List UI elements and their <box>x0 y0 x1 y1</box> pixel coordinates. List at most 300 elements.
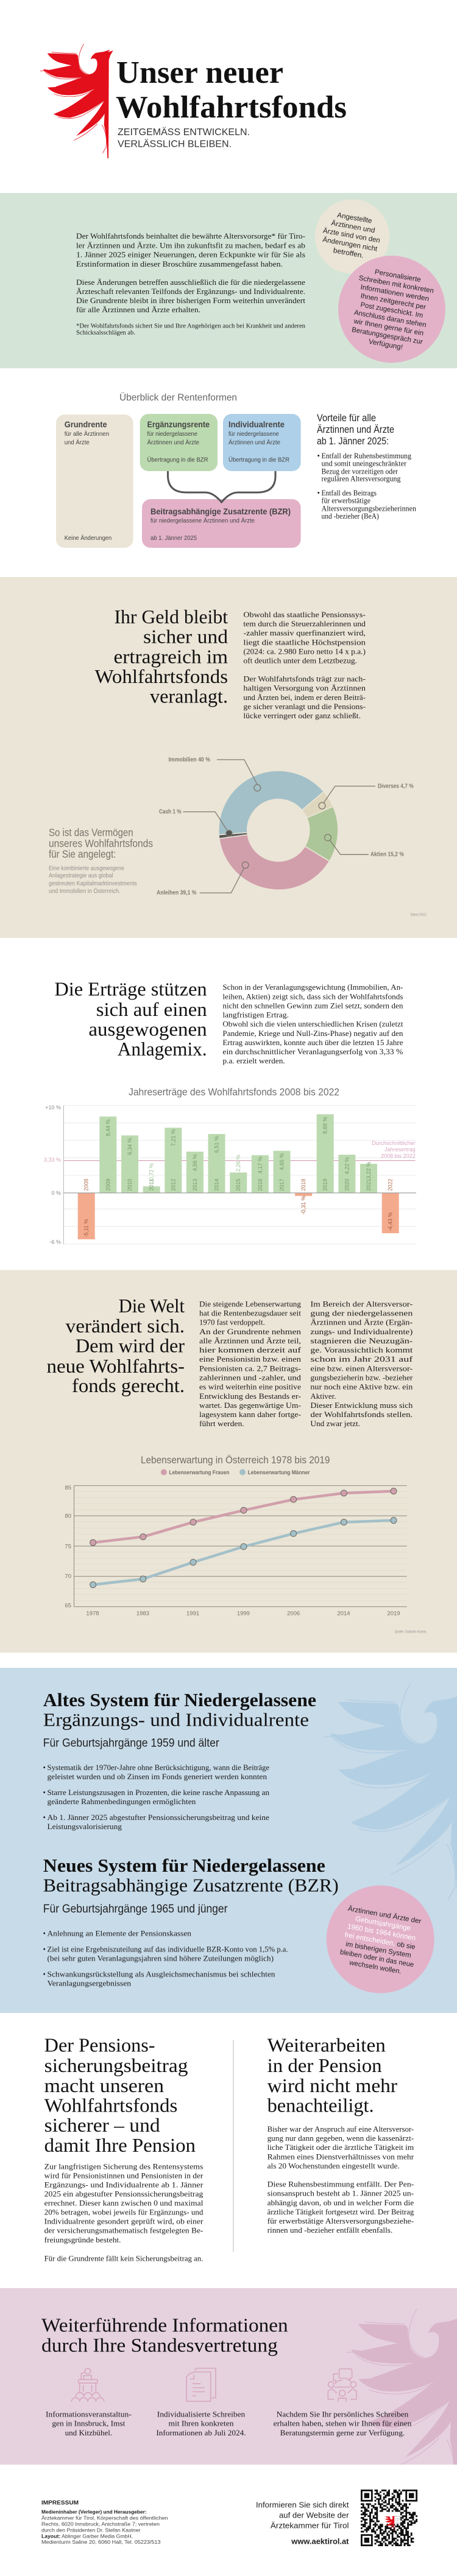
body text column 2: gung der niedergelassenen <box>310 1309 413 1318</box>
panel: contribution and continued work <box>0 2013 457 2288</box>
panel: the world is changing <box>0 1270 457 1653</box>
body text: Schon in der Veranlagungsgewichtung (Immobilien, An- <box>222 983 403 992</box>
callout: birth years 1960 to 1964: frei entscheiden, ob sie <box>344 1931 416 1951</box>
callout: employed doctors: betroffen. <box>333 247 364 260</box>
text: letters: Informationen ab Juli 2024. <box>156 2429 246 2437</box>
bar chart: annual returns: 6,34 % <box>127 1138 133 1155</box>
callout: birth years 1960 to 1964: 1960 bis 1964 können <box>347 1923 416 1942</box>
subtitle <box>118 127 250 150</box>
panel: returns <box>0 938 457 1270</box>
intro text: 1. Jänner 2025 einiger Neuerungen, deren Eckpunkte wir für Sie als <box>76 251 305 259</box>
heading: new system: Für Geburtsjahrgänge 1965 und jünger <box>43 1903 228 1916</box>
heading: continued work <box>267 2034 397 2116</box>
list: new system: Ziel ist eine Ergebniszuteilung auf das individuelle BZR-Konto von 1,5% p.a. <box>48 1945 288 1954</box>
body text: ge sicher veranlagt und die Pensions- <box>243 702 366 711</box>
text: asset allocation: und Immobilien in Österreich. <box>49 887 121 895</box>
body text: continued work: als 20 Wochenstunden eingestellt wurde. <box>267 2161 400 2170</box>
heading: continued work: benachteiligt. <box>267 2095 374 2116</box>
heading: money stays safe: ertragreich im <box>113 645 228 667</box>
title: Unser neuer <box>116 55 283 90</box>
body text column 1: Die steigende Lebenserwartung <box>199 1300 302 1308</box>
bar chart: annual returns: 2015 <box>235 1178 241 1191</box>
list: new system <box>43 1929 288 1988</box>
intro text: Die Grundrente bleibt in ihrer bisherigen Form weiterhin unverändert <box>76 296 306 305</box>
footnote: Schicksalsschlägen ab. <box>76 330 135 336</box>
body text column 2: nur noch eine Aktive bzw. ein <box>310 1383 413 1391</box>
body text column 2: zungs- und Individualrente) <box>310 1328 413 1336</box>
line chart: life expectancy: 1983 <box>136 1610 149 1617</box>
body text: pension contribution: Für die Grundrente fällt kein Sicherungsbeitrag an. <box>44 2255 203 2263</box>
list: new system: Anlehnung an Elemente der Pensionskassen <box>48 1929 192 1937</box>
arrow: brace into BZR <box>168 471 275 502</box>
box: Grundrente <box>56 415 133 548</box>
list: old system: • <box>43 1813 46 1822</box>
body text: ein durchschnittlicher Veranlagungserfolg von 3,33 % <box>222 1048 403 1056</box>
box: Ergänzungsrente <box>140 414 218 471</box>
bar chart: annual returns: -4,43 % <box>388 1212 394 1231</box>
body text: continued work: Rahmen eines Dienstverhältnisses von mehr <box>267 2152 414 2161</box>
bar chart: annual returns: 2010 <box>127 1178 133 1191</box>
list: old system: Ab 1. Jänner 2025 abgestufter Pensionssicherungsbeitrag und keine <box>48 1813 269 1822</box>
donut chart: Aktien 15,2 % <box>370 851 404 858</box>
list: advantages: • <box>317 489 320 497</box>
body text column 1: An der Grundrente nehmen <box>199 1328 302 1336</box>
subtitle: VERLÄSSLICH BLEIBEN. <box>118 139 232 150</box>
body text column 2: stagnieren die Neuzugän- <box>310 1337 413 1345</box>
bar chart: annual returns: 4,56 % <box>192 1154 198 1171</box>
bar chart: annual returns: 2016 <box>257 1178 263 1191</box>
bar chart: annual returns: 2008 <box>83 1178 90 1191</box>
imprint: Rechts, 6020 Innsbruck, Anichstraße 7; vertreten <box>41 2522 160 2527</box>
callout: personalised letters: wir Ihnen gerne für ein <box>353 318 424 337</box>
heading: further information: durch Ihre Standesvertretung <box>41 2334 278 2356</box>
text: asset allocation: für Sie angelegt: <box>49 848 116 860</box>
body text: nicht den schnellen Gewinn zum Ziel setzt, sondern den <box>222 1001 403 1010</box>
text: consultation: erhalten haben, stehen wir Ihnen für einen <box>274 2419 412 2427</box>
line chart: life expectancy: 2019 <box>387 1610 400 1617</box>
bar chart: annual returns: Jahreserträge des Wohlfahrtsfonds 2008 bis 2022 <box>129 1086 339 1098</box>
box: Grundrente: und Ärzte <box>65 439 90 446</box>
list: new system: (bei sehr guten Veranlagungsjahren sind höhere Zuteilungen möglich) <box>48 1954 274 1962</box>
panel: overview of pension types <box>0 368 457 577</box>
icon: QR code: KAMMER <box>395 2518 404 2520</box>
website note: www.aektirol.at <box>291 2537 349 2546</box>
body text column 1: es wird weiterhin eine positive <box>199 1383 301 1391</box>
list: advantages: Bezug der vorzeitigen oder <box>322 467 399 475</box>
bar chart: annual returns: 2020 <box>344 1178 350 1191</box>
body text column 2 <box>310 1300 413 1428</box>
list: old system: Leistungsvalorisierung <box>48 1822 122 1831</box>
box: Individualrente: Individualrente <box>228 419 285 429</box>
imprint: Medienturm Saline 20, 6060 Hall, Tel. 05223/513 <box>41 2539 161 2545</box>
text: letters <box>156 2410 246 2437</box>
source note: Stand 2022 <box>410 912 427 917</box>
line chart: life expectancy: 85 <box>65 1485 71 1491</box>
list: new system: • <box>43 1929 46 1937</box>
bar chart: annual returns: 2021 <box>366 1178 372 1191</box>
heading: new system <box>43 1855 339 1916</box>
heading: advantages <box>317 413 394 447</box>
body text <box>222 983 403 1065</box>
heading: pension contribution <box>44 2034 196 2156</box>
body text column 2: gungsbezieherin bzw. -bezieher <box>310 1373 413 1382</box>
body text column 2: ge. Voraussichtlich kommt <box>310 1346 413 1354</box>
body text column 1: führt werden. <box>199 1419 244 1428</box>
callout: employed doctors: Angestellte <box>336 212 372 225</box>
bar chart: annual returns: 6,51 % <box>213 1136 219 1153</box>
icon: eagle watermark <box>324 1684 457 1910</box>
bar chart: annual returns: 3,22 % <box>366 1162 372 1179</box>
box: Beitragsabhängige Zusatzrente: ab 1. Jänner 2025 <box>151 534 197 542</box>
body text: lücke verringert oder ganz schließt. <box>243 712 361 720</box>
list: advantages: Entfall der Ruhensbestimmung <box>322 452 412 460</box>
box: Ergänzungsrente: Ergänzungsrente <box>147 419 210 429</box>
box: Ergänzungsrente: Ärztinnen und Ärzte <box>147 439 199 446</box>
callout: personalised letters: Informationen werden <box>360 284 430 303</box>
line chart: life expectancy: 1978 <box>86 1610 99 1617</box>
icon: documents <box>186 2368 216 2401</box>
body text column 2: eine bzw. einen Altersversor- <box>310 1364 413 1373</box>
body text: oft deutlich unter dem Letztbezug. <box>243 656 357 665</box>
bar chart: annual returns: 4,22 % <box>344 1157 350 1174</box>
intro text <box>76 232 306 314</box>
body text: continued work: abhängig davon, ob und in welcher Form die <box>267 2199 414 2207</box>
imprint: Ärztekammer für Tirol, Körperschaft des öffentlichen <box>41 2515 168 2521</box>
footnote <box>76 323 306 336</box>
bar chart: annual returns: 4,17 % <box>257 1157 263 1174</box>
heading: money stays safe: Ihr Geld bleibt <box>115 606 228 628</box>
body text: p.a. erzielt werden. <box>222 1057 285 1065</box>
list: advantages: und somit uneingeschränkter <box>322 460 407 468</box>
bar chart: annual returns: -0,31 % <box>300 1195 306 1214</box>
bar chart: annual returns: 8,44 % <box>105 1119 111 1136</box>
bar chart: annual returns: 2011 <box>149 1179 155 1191</box>
list: advantages: • <box>317 452 320 460</box>
body text: continued work <box>267 2125 414 2235</box>
callout: personalised letters: Personalisierte <box>374 268 422 284</box>
heading: old system: Ergänzungs- und Individualrente <box>43 1709 309 1731</box>
imprint: Medieninhaber (Verleger) und Herausgeber: <box>41 2509 147 2515</box>
body text: continued work: für erwerbstätige Altersversorgungsbeziehe- <box>267 2217 414 2225</box>
body text column 2: Dieser Entwicklung muss sich <box>310 1401 413 1410</box>
body text: Der Wohlfahrtsfonds trägt zur nach- <box>243 675 366 684</box>
callout: employed doctors: Ärzte sind von den <box>322 227 381 245</box>
heading: returns <box>54 978 207 1060</box>
icon: QR code: TIROL <box>395 2522 401 2524</box>
heading: pension contribution: Wohlfahrtsfonds <box>44 2095 177 2116</box>
icon: lecture <box>71 2368 104 2402</box>
body text: continued work: ärztliche Tätigkeit fortgesetzt wird. Der Beitrag <box>267 2208 414 2216</box>
heading: money stays safe: Wohlfahrtsfonds <box>95 665 228 687</box>
bar chart: annual returns: 8,68 % <box>322 1117 328 1134</box>
list: advantages <box>317 452 417 520</box>
line chart: life expectancy: 70 <box>65 1573 71 1580</box>
body text: continued work: liche Tätigkeit oder die ärztliche Tätigkeit im <box>267 2143 414 2152</box>
body text: continued work: Bisher war der Anspruch auf eine Altersversor- <box>267 2125 414 2133</box>
text: consultation <box>274 2410 412 2437</box>
box: Grundrente: Keine Änderungen <box>65 534 112 542</box>
list: old system <box>43 1763 270 1831</box>
line chart: life expectancy: 1991 <box>186 1610 199 1617</box>
box: Individualrente <box>223 414 301 471</box>
callout: personalised letters: Schreiben mit konkreten <box>358 275 434 295</box>
heading: world changes: fonds gerecht. <box>72 1374 185 1396</box>
body text column 1: wartet. Das gegenwärtige Um- <box>199 1401 301 1410</box>
bar chart: annual returns: 3,33 % <box>44 1157 61 1163</box>
icon: QR code <box>361 2490 417 2546</box>
body text: Ertrag auswirkten, konnte auch über die letzten 15 Jahre <box>222 1038 403 1047</box>
list: old system: geänderte Rahmenbedingungen ermöglichten <box>48 1797 196 1806</box>
callout: personalised letters: Beratungsgespräch zur <box>351 326 423 346</box>
bar chart: annual returns: 2008 bis 2022 <box>381 1153 416 1159</box>
icon: eagle watermark <box>346 2308 457 2465</box>
body text column 2: Ärztinnen und Ärzte (Ergän- <box>310 1318 413 1327</box>
body text column 1: zahlerinnen und -zahler, und <box>199 1373 302 1382</box>
body text column 1: lagesystem kann daher fortge- <box>199 1410 301 1419</box>
body text column 1: Pensionisten ca. 2,7 Beitrags- <box>199 1364 301 1373</box>
text: events: Informationsveranstaltun- <box>46 2410 132 2419</box>
heading: advantages: Vorteile für alle <box>317 413 376 424</box>
subtitle: ZEITGEMÄSS ENTWICKELN. <box>118 127 250 138</box>
intro text: Ärzteschaft relevanten Teilfonds der Ergänzungs- und Individualrente. <box>76 287 305 296</box>
bar chart: annual returns: 2012 <box>170 1178 176 1191</box>
heading: further information: Weiterführende Informationen <box>41 2314 288 2336</box>
heading: pension contribution: damit Ihre Pension <box>44 2134 196 2156</box>
text: asset allocation: gestreuten Kapitalmarktinvestments <box>49 880 137 887</box>
heading: old system <box>43 1689 316 1750</box>
list: new system: Schwankungsrückstellung als Ausgleichsmechanismus bei schlechten <box>48 1970 275 1979</box>
bar chart: annual returns: Durchschnittlicher <box>372 1140 416 1146</box>
list: advantages: Entfall des Beitrags <box>322 489 377 497</box>
heading: money stays safe <box>95 606 228 707</box>
intro text: Diese Änderungen betreffen ausschließlich die für die niedergelassene <box>76 278 305 287</box>
line chart: life expectancy: 2014 <box>337 1610 350 1617</box>
list: new system: • <box>43 1945 46 1954</box>
title: Wohlfahrtsfonds <box>116 90 347 125</box>
imprint: IMPRESSUM <box>41 2499 79 2507</box>
bar chart: annual returns: 2014 <box>213 1178 219 1191</box>
body text: pension contribution: Ergänzungs- und Individualrente ab 1. Jänner <box>44 2180 204 2189</box>
intro text: für alle Ärztinnen und Ärzte erhalten. <box>76 306 200 314</box>
bar chart: annual returns: 2019 <box>322 1178 328 1191</box>
heading: pension contribution: sicherungsbeitrag <box>44 2054 188 2076</box>
list: old system: • <box>43 1788 46 1797</box>
donut chart: Anleihen 39,1 % <box>157 890 196 897</box>
body text: pension contribution: Individualrente gesondert geprüft wird, ob einer <box>44 2217 204 2226</box>
line chart: life expectancy: 1999 <box>237 1610 250 1617</box>
body text: continued work: Diese Ruhensbestimmung entfällt. Der Pen- <box>267 2180 414 2188</box>
body text: continued work: sionsanspruch besteht ab 1. Jänner 2025 un- <box>267 2189 414 2197</box>
panel: old and new system <box>0 1668 457 2013</box>
text: consultation: Nachdem Sie Ihr persönliches Schreiben <box>277 2410 409 2419</box>
body text: continued work: rinnen und -bezieher entfällt ebenfalls. <box>267 2226 392 2235</box>
heading: continued work: wird nicht mehr <box>267 2074 397 2096</box>
heading: pension contribution: Der Pensions- <box>44 2034 155 2056</box>
heading: new system: Neues System für Niedergelassene <box>43 1855 325 1876</box>
body text: -zahler massiv querfinanziert wird, <box>243 629 366 637</box>
heading: world changes: neue Wohlfahrts- <box>46 1355 185 1377</box>
body text column 2: Aktiver. <box>310 1392 336 1401</box>
body text column 1: Entwicklung des Bestands er- <box>199 1392 301 1401</box>
bar chart: annual returns: 2022 <box>388 1178 394 1191</box>
body text: liegt die staatliche Höchstpension <box>243 638 366 646</box>
website note <box>256 2501 349 2546</box>
heading: returns: ausgewogenen <box>88 1018 207 1040</box>
bar chart: annual returns: 4,65 % <box>279 1153 285 1171</box>
bar chart: annual returns: 0 % <box>51 1190 61 1196</box>
body text column 1 <box>199 1300 302 1428</box>
heading: old system: Altes System für Niedergelassene <box>43 1689 316 1710</box>
body text <box>243 611 366 720</box>
box: Grundrente: für alle Ärztinnen <box>65 430 109 438</box>
heading: old system: Für Geburtsjahrgänge 1959 und älter <box>43 1737 219 1750</box>
website note: Ärztekammer für Tirol <box>271 2521 349 2530</box>
heading: continued work: in der Pension <box>267 2054 382 2076</box>
heading: returns: sich auf einen <box>96 998 207 1020</box>
bar chart: annual returns: 2017 <box>279 1178 285 1191</box>
heading: money stays safe: veranlagt. <box>150 685 228 707</box>
panel: introduction <box>0 193 457 368</box>
body text: pension contribution: 2025 ein abgestufter Pensionssicherungsbeitrag <box>44 2190 204 2199</box>
text: letters: mit Ihren konkreten <box>168 2419 234 2427</box>
body text: leihen, Aktien) zeigt sich, dass sich der Wohlfahrtsfonds <box>222 992 403 1001</box>
bar chart: annual returns: Jahresertrag <box>384 1147 416 1153</box>
heading: world changes: Die Welt <box>119 1295 185 1317</box>
body text column 2: schon im Jahr 2031 auf <box>310 1355 413 1363</box>
callout: employed doctors: Änderungen nicht <box>322 236 378 253</box>
panel: investment <box>0 577 457 938</box>
imprint: Layout: Ablinger Garber Media GmbH, <box>41 2533 133 2539</box>
bar chart: annual returns: 0,72 % <box>149 1163 155 1180</box>
text: letters: Individualisierte Schreiben <box>157 2410 246 2419</box>
heading: pension contribution: sicherer – und <box>44 2114 160 2136</box>
donut chart: Diverses 4,7 % <box>378 783 414 789</box>
body text: pension contribution <box>44 2162 204 2263</box>
line chart: life expectancy: 75 <box>65 1543 71 1550</box>
body text: Pandemie, Kriege und Null-Zins-Phase) negativ auf den <box>222 1029 403 1038</box>
heading: world changes <box>46 1295 185 1396</box>
intro text: Der Wohlfahrtsfonds beinhaltet die bewährte Altersvorsorge* für Tiro- <box>76 232 305 240</box>
list: advantages: Altersversorgungsbezieherinnen <box>322 504 417 513</box>
text: events <box>46 2410 132 2437</box>
body text: und Ärzten bei, indem er deren Beiträ- <box>243 693 366 702</box>
list: old system: Systematik der 1970er-Jahre ohne Berücksichtigung, wann die Beiträge <box>48 1763 269 1772</box>
panel: footer <box>0 2465 457 2576</box>
body text: Obwohl sich die vielen unterschiedlichen Krisen (zuletzt <box>222 1020 403 1029</box>
bar chart: annual returns: 2018 <box>300 1178 306 1191</box>
bar chart: annual returns: 2,26 % <box>235 1155 241 1172</box>
box: Ergänzungsrente: für niedergelassene <box>147 430 197 438</box>
heading: further information <box>41 2314 288 2356</box>
line chart: life expectancy: Quelle: Statistik Austria <box>395 1630 427 1634</box>
callout: birth years 1960 to 1964: bleiben oder in das neue <box>339 1948 414 1969</box>
body text column 2: Im Bereich der Altersversor- <box>310 1300 413 1308</box>
callout: employed doctors <box>315 200 389 274</box>
line chart: life expectancy: 65 <box>65 1602 71 1609</box>
donut chart: Immobilien 40 % <box>168 757 210 763</box>
donut chart: Cash 1 % <box>159 809 182 816</box>
bar chart: annual returns: +10 % <box>45 1104 61 1110</box>
heading: pension contribution: macht unseren <box>44 2074 164 2096</box>
line chart: life expectancy <box>65 1454 427 1634</box>
bar chart: annual returns: 2013 <box>192 1178 198 1191</box>
bar chart: annual returns: -6 % <box>49 1239 61 1245</box>
icon: QR code: FÜR <box>395 2519 400 2522</box>
box: Grundrente: Grundrente <box>65 419 107 429</box>
heading: returns: Anlagemix. <box>118 1038 207 1060</box>
body text: pension contribution: errechnet. Dieser kann zwischen 0 und maximal <box>44 2199 204 2207</box>
box: Individualrente: Ärztinnen und Ärzte <box>228 439 280 446</box>
heading: advantages: ab 1. Jänner 2025: <box>317 436 389 447</box>
text: asset allocation: So ist das Vermögen <box>49 827 133 839</box>
title <box>116 55 347 125</box>
callout: personalised letters: Anschluss daran stehen <box>353 309 427 329</box>
heading: returns: Die Erträge stützen <box>54 978 207 1000</box>
heading: advantages: Ärztinnen und Ärzte <box>317 424 394 435</box>
body text column 1: alle Ärztinnen und Ärzte teil, <box>199 1337 301 1345</box>
list: advantages: regulären Altersversorgung <box>322 475 401 483</box>
text: asset allocation: Eine kombinierte ausgewogene <box>49 864 124 872</box>
box: Individualrente: für niedergelassene <box>228 430 279 438</box>
icon: consultation <box>328 2369 356 2402</box>
box: Beitragsabhängige Zusatzrente <box>142 499 301 548</box>
imprint <box>41 2499 168 2545</box>
callout: personalised letters: Verfügung! <box>368 338 403 351</box>
website note: Informieren Sie sich direkt <box>256 2501 349 2510</box>
list: old system: • <box>43 1763 46 1772</box>
icon: QR code: ÄRZTE <box>395 2515 402 2518</box>
box: Individualrente: Übertragung in die BZR <box>228 457 289 464</box>
bar chart: annual returns: 2009 <box>105 1178 111 1191</box>
list: old system: geleistet wurden und ob Zinsen im Fonds generiert werden konnten <box>48 1773 267 1781</box>
panel: further information <box>0 2288 457 2465</box>
donut chart <box>157 757 414 897</box>
legend: Lebenserwartung Männer <box>247 1469 310 1476</box>
heading: world changes: Dem wird der <box>76 1335 185 1357</box>
heading: overview: Überblick der Rentenformen <box>119 392 237 403</box>
body text column 1: hier kommen derzeit auf <box>199 1346 302 1354</box>
body text: tem durch die Steuerzahlerinnen und <box>243 620 366 628</box>
intro text: Erstinformation in dieser Broschüre zusammengefasst haben. <box>76 260 283 268</box>
body text: pension contribution: der versicherungsmathematisch festgelegten Be- <box>44 2227 203 2235</box>
callout: personalised letters <box>338 256 445 363</box>
heading: money stays safe: sicher und <box>143 626 228 648</box>
line chart: life expectancy: 2006 <box>287 1610 300 1617</box>
callout: birth years 1960 to 1964 <box>327 1886 434 1993</box>
callout: personalised letters: Post zugeschickt. Im <box>360 301 423 320</box>
text: asset allocation <box>49 827 153 895</box>
list: new system: • <box>43 1970 46 1979</box>
legend <box>161 1469 310 1476</box>
panel: header <box>0 0 457 193</box>
footnote: *Der Wohlfahrtsfonds sichert Sie und Ihre Angehörigen auch bei Krankheit und anderen <box>76 323 306 330</box>
list: advantages: für erwerbstätige <box>322 497 370 505</box>
callout: birth years 1960 to 1964: Geburtsjahrgänge <box>355 1916 411 1933</box>
box: Ergänzungsrente: Übertragung in die BZR <box>147 457 208 464</box>
list: old system: Starre Leistungszusagen in Prozenten, die keine rasche Anpassung an <box>48 1788 270 1797</box>
list: new system: Veranlagungsergebnissen <box>48 1979 132 1988</box>
body text: pension contribution: wird für Pensionistinnen und Pensionisten in der <box>44 2172 204 2180</box>
callout: employed doctors: Ärztinnen und <box>330 220 375 234</box>
website note: auf der Website der <box>279 2511 349 2520</box>
heading: new system: Beitragsabhängige Zusatzrente (BZR) <box>43 1875 339 1896</box>
body text column 1: 1970 fast verdoppelt. <box>199 1318 265 1327</box>
body text: continued work: gung nur dann gegeben, wenn die kassenärzt- <box>267 2134 414 2143</box>
intro text: ler Ärztinnen und Ärzte. Um ihn zukunftsfit zu machen, bedarf es ab <box>76 241 305 250</box>
body text: pension contribution: 20% betragen, wobei jeweils für Ergänzungs- und <box>44 2208 204 2217</box>
body text: langfristigen Ertrag. <box>222 1011 289 1020</box>
box: Beitragsabhängige Zusatzrente: Beitragsabhängige Zusatzrente (BZR) <box>151 506 291 516</box>
